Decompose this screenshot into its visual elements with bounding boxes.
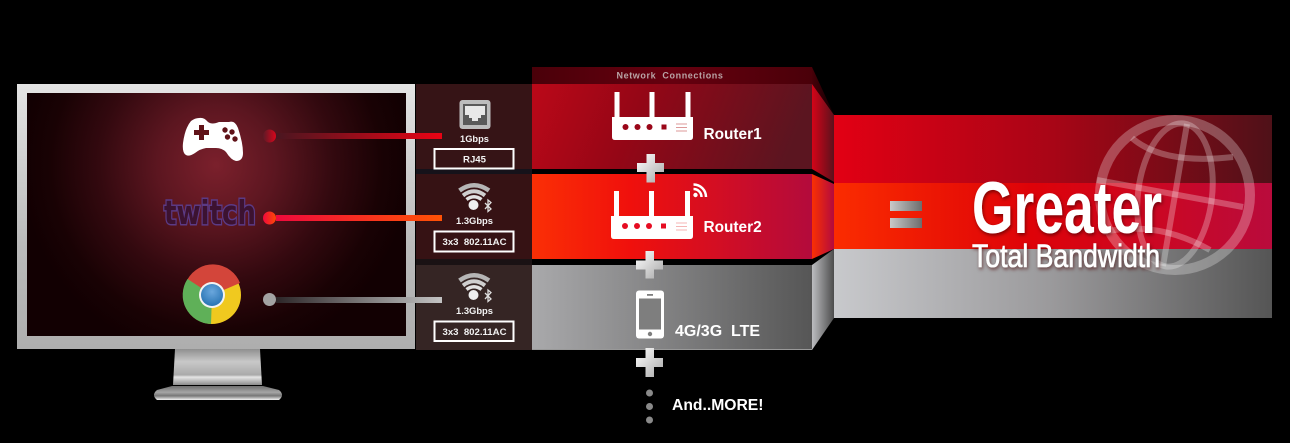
panel: network connections header: Network Connections [616, 70, 724, 80]
row: router 2 wireless spec: 1.3Gbps [456, 215, 493, 226]
icon: globe [1097, 119, 1250, 271]
icon: plus 3 [636, 348, 663, 377]
icon: plus 2 [636, 251, 663, 278]
row: LTE wireless spec: 1.3Gbps [456, 305, 493, 316]
panel: greater bandwidth result [834, 115, 1272, 318]
icon: router 1 [612, 92, 693, 140]
icon: twitch logo: twitch [164, 193, 256, 232]
icon: wifi and bluetooth [460, 275, 491, 302]
icon: chrome logo [183, 264, 241, 324]
row: RJ45 connection spec: 1Gbps [460, 134, 489, 144]
label: 3x3 802.11AC: 3x3 802.11AC [442, 237, 507, 248]
monitor screen [27, 93, 406, 336]
panel: connection specs column [416, 84, 532, 350]
panel: computer monitor [17, 84, 415, 400]
icon: router 2 with signal [611, 184, 706, 239]
icon: game controller [183, 118, 243, 161]
label: Router2: Router2 [704, 219, 762, 236]
row: LTE wireless spec [434, 275, 514, 341]
monitor stand [154, 349, 282, 400]
icon: ethernet port [460, 100, 490, 129]
label: 4G/3G LTE: 4G/3G LTE [675, 323, 760, 340]
row: router 2 wireless spec [434, 185, 514, 252]
row: game connection line [263, 130, 442, 142]
label: And..MORE!: And..MORE! [672, 397, 764, 414]
panel: router 2 band [532, 174, 834, 259]
label: RJ45: RJ45 [463, 154, 487, 166]
label: Router1: Router1 [704, 126, 762, 143]
panel: router 1 band [532, 84, 834, 182]
panel: 4G/3G LTE band [532, 249, 834, 350]
icon: equals sign [890, 201, 922, 228]
icon: smartphone [636, 290, 664, 338]
row: RJ45 connection spec [434, 100, 514, 168]
monitor bezel [17, 84, 415, 349]
label: 3x3 802.11AC: 3x3 802.11AC [442, 327, 507, 338]
heading: Greater: Greater [972, 168, 1162, 249]
ellipsis dots [646, 390, 653, 424]
row: chrome connection line [263, 293, 442, 306]
subheading: Total Bandwidth: Total Bandwidth [972, 238, 1160, 274]
panel: network connections header [532, 67, 834, 115]
icon: wifi and bluetooth [460, 185, 491, 212]
icon: plus 1 [637, 154, 664, 182]
row: twitch connection line [263, 212, 442, 224]
